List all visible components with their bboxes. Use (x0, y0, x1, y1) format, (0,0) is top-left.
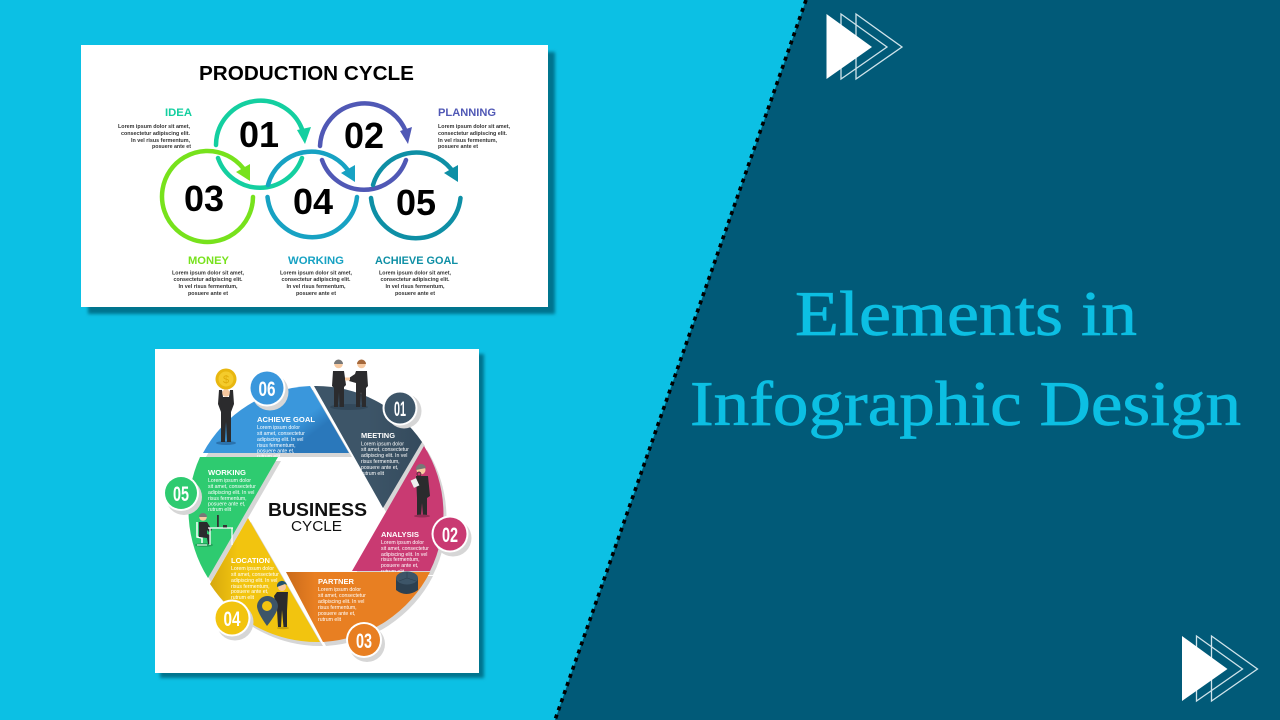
segment: achieve goal: adipiscing elit. In vel (257, 437, 303, 443)
dotted diagonal divider (555, 0, 806, 720)
segment shadows (191, 390, 446, 646)
text block: achieve goal: consectetur adipiscing elit. (380, 277, 450, 283)
text block: money: Lorem ipsum dolor sit amet, (172, 270, 244, 276)
segment: partner: adipiscing elit. In vel (318, 599, 364, 605)
segment: location: posuere ante et, (231, 589, 268, 595)
title: Infographic Design (690, 368, 1241, 439)
segment: working (188, 457, 278, 578)
text block: planning: In vel risus fermentum, (438, 138, 497, 144)
ring 01: 01 (239, 114, 279, 155)
ring 05: 05 (396, 182, 436, 223)
ring 04 (268, 152, 357, 237)
segment: meeting: adipiscing elit. In vel (361, 453, 407, 459)
figure: man at desk (195, 513, 233, 547)
segment: achieve goal: rutrum elit (257, 454, 281, 460)
heading: production cycle: PRODUCTION CYCLE (199, 63, 414, 85)
text block: achieve goal: Lorem ipsum dolor sit amet, (379, 270, 451, 276)
badge 02 (432, 516, 472, 556)
badge 01: 01 (394, 398, 406, 421)
badge 04: 04 (224, 608, 241, 631)
panel: business cycle card (155, 349, 484, 678)
segment: analysis: adipiscing elit. In vel (381, 552, 427, 558)
text block: planning: PLANNING (438, 107, 496, 119)
segment: achieve goal: posuere ante et, (257, 448, 294, 454)
segment: partner: rutrum elit (318, 617, 342, 623)
badge 03 (346, 622, 385, 662)
ring 02: 02 (344, 115, 384, 156)
text block: money: consectetur adipiscing elit. (174, 277, 243, 283)
icon: bottom play arrows (1182, 636, 1258, 701)
segment: partner: risus fermentum, (318, 605, 357, 611)
segment: meeting: rutrum elit (361, 471, 385, 477)
text block: money: In vel risus fermentum, (178, 284, 238, 290)
figure: man holding coin (216, 368, 236, 445)
segment: working: WORKING (208, 468, 246, 477)
segment: working: risus fermentum, (208, 496, 247, 502)
segment: analysis: Lorem ipsum dolor (381, 540, 424, 546)
segment: location: sit amet, consectetur (231, 572, 279, 578)
segment: achieve goal: sit amet, consectetur (257, 431, 305, 437)
segment: partner: posuere ante et, (318, 611, 356, 617)
segment: location: adipiscing elit. In vel (231, 578, 277, 584)
segment: partner: sit amet, consectetur (318, 593, 366, 599)
segment: analysis (352, 446, 443, 575)
segment: achieve goal: risus fermentum, (257, 443, 296, 449)
segment: working: sit amet, consectetur (208, 484, 256, 490)
text block: planning: posuere ante et (438, 144, 478, 150)
segment: location: risus fermentum, (231, 584, 270, 590)
segment: meeting: risus fermentum, (361, 459, 400, 465)
segment: location: LOCATION (231, 556, 270, 565)
ring 03: 03 (184, 178, 224, 219)
figure: two men shaking hands (330, 360, 368, 410)
segment: analysis: ANALYSIS (381, 530, 419, 539)
segment: analysis: risus fermentum, (381, 557, 420, 563)
segment: analysis: rutrum elit (381, 569, 405, 575)
segment: achieve goal (203, 386, 349, 460)
segment: working: posuere ante et, (208, 502, 246, 508)
text block: achieve goal: ACHIEVE GOAL (375, 255, 458, 267)
text block: idea: consectetur adipiscing elit. (121, 131, 190, 137)
segment: meeting (314, 386, 422, 508)
badge 06: 06 (258, 378, 276, 401)
segment: analysis: posuere ante et, (381, 563, 418, 569)
ring 02 (320, 103, 412, 190)
badge 05: 05 (173, 483, 189, 506)
segment: location (210, 518, 320, 642)
segment: location: Lorem ipsum dolor (231, 566, 274, 572)
ring 05 (371, 153, 460, 238)
text block: planning: consectetur adipiscing elit. (438, 131, 507, 137)
segment: analysis: sit amet, consectetur (381, 546, 429, 552)
ring 03 (162, 151, 253, 242)
text block: working: Lorem ipsum dolor sit amet, (280, 270, 352, 276)
badge 05 (163, 475, 202, 515)
title (690, 278, 1241, 439)
segment: location: rutrum elit (231, 595, 255, 601)
segment: meeting: sit amet, consectetur (361, 447, 409, 453)
segment: partner: Lorem ipsum dolor (318, 587, 361, 593)
segment: partner: PARTNER (318, 577, 355, 586)
text block: idea (118, 107, 192, 150)
text block: working (280, 255, 352, 297)
center heading: business cycle: BUSINESS (268, 500, 367, 520)
icon: database cylinder (396, 572, 418, 594)
text block: money: posuere ante et (188, 291, 228, 297)
text block: money: MONEY (188, 255, 230, 267)
text block: money (172, 255, 244, 297)
segment: achieve goal: ACHIEVE GOAL (257, 415, 315, 424)
segment: working: rutrum elit (208, 507, 232, 513)
badge 01 (382, 390, 422, 428)
figure: man holding coin: $ (223, 374, 229, 386)
chart: interlocking numbered rings (162, 101, 460, 242)
segment: partner (286, 572, 430, 642)
figure: man reading report (411, 464, 430, 518)
badge 06 (248, 370, 288, 410)
text block: idea: In vel risus fermentum, (131, 138, 190, 144)
text block: achieve goal: posuere ante et (395, 291, 435, 297)
text block: idea: IDEA (165, 107, 192, 119)
segment: meeting: MEETING (361, 431, 395, 440)
center heading: business cycle: CYCLE (291, 518, 342, 535)
ring 04: 04 (293, 181, 333, 222)
text block: working: WORKING (288, 255, 344, 267)
badge 04 (214, 600, 254, 640)
segment: working: Lorem ipsum dolor (208, 478, 251, 484)
text block: working: In vel risus fermentum, (286, 284, 346, 290)
segment: meeting: posuere ante et, (361, 465, 398, 471)
ring 01 (216, 101, 311, 188)
text block: working: posuere ante et (296, 291, 336, 297)
text block: achieve goal (375, 255, 458, 297)
text block: idea: posuere ante et (152, 144, 191, 150)
badge 02: 02 (442, 524, 458, 547)
segment: meeting: Lorem ipsum dolor (361, 442, 404, 448)
panel: production cycle card (81, 45, 555, 314)
text block: planning: Lorem ipsum dolor sit amet, (438, 124, 510, 130)
badge 03: 03 (356, 630, 372, 653)
segment: achieve goal: Lorem ipsum dolor (257, 425, 300, 431)
icon: top play arrows (826, 14, 902, 79)
segment: working: adipiscing elit. In vel (208, 490, 254, 496)
center heading: business cycle (268, 500, 367, 535)
text block: planning (438, 107, 510, 150)
text block: working: consectetur adipiscing elit. (282, 277, 351, 283)
text block: achieve goal: In vel risus fermentum, (386, 284, 445, 290)
title: Elements in (795, 278, 1137, 349)
dark diagonal panel (555, 0, 1280, 720)
text block: idea: Lorem ipsum dolor sit amet, (118, 124, 190, 130)
figure: man with location pin (257, 581, 289, 629)
